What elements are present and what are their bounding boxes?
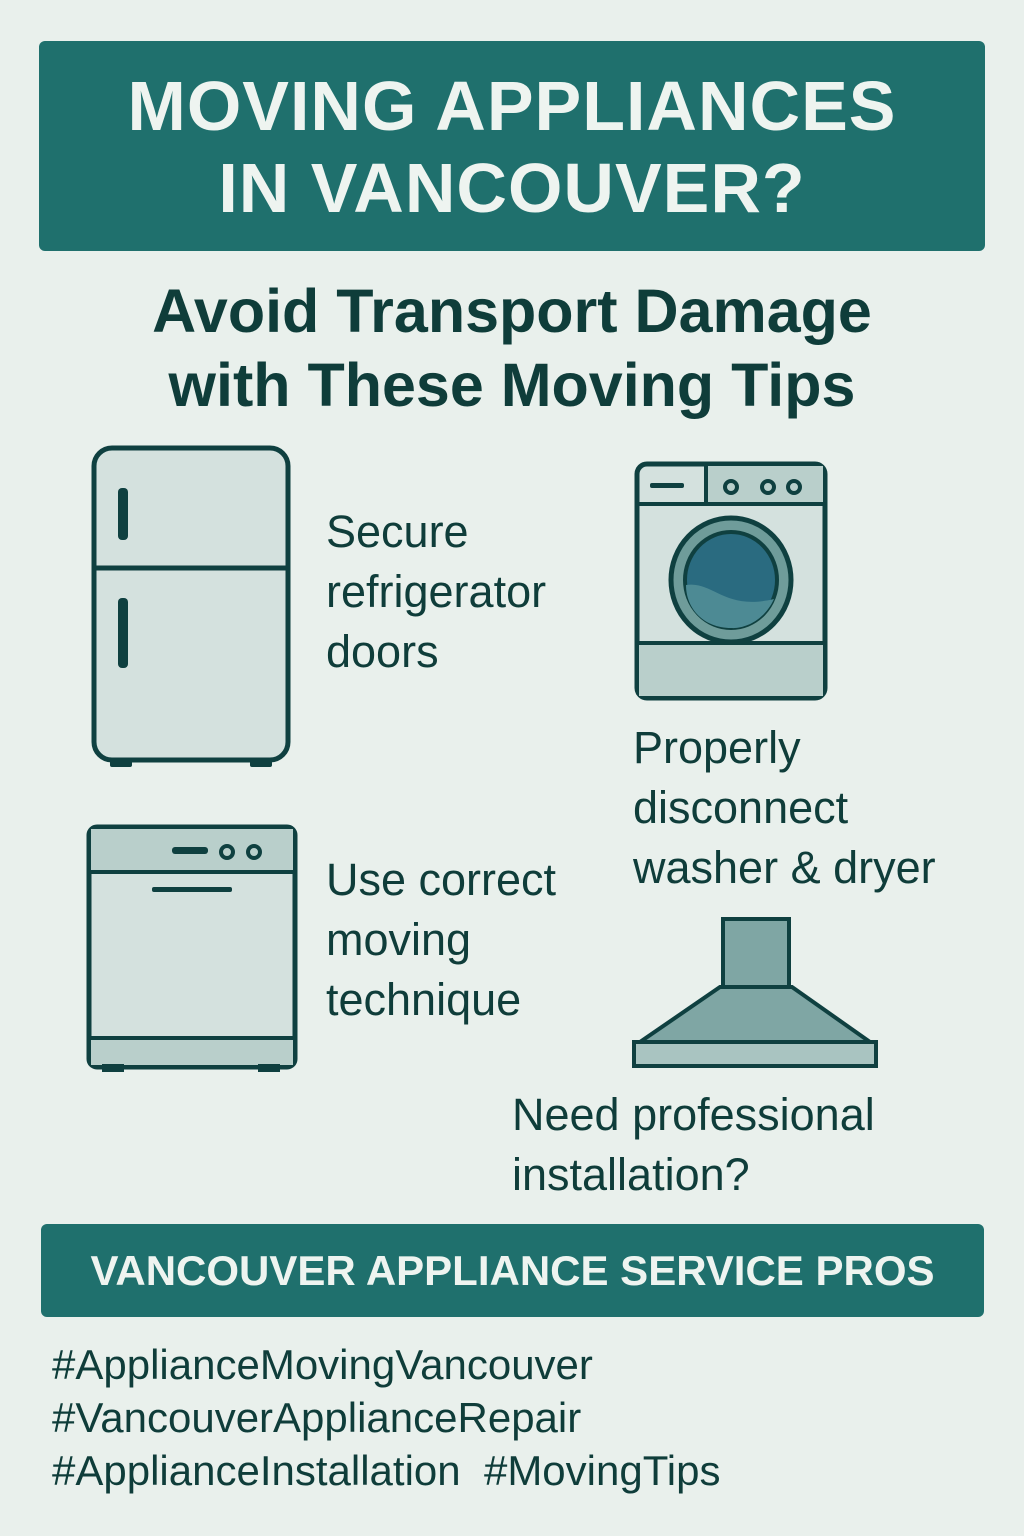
subtitle: Avoid Transport Damage: [152, 277, 872, 345]
icon: refrigerator: [92, 446, 290, 767]
text: secure fridge doors: Secure: [326, 506, 469, 557]
title banner: IN VANCOUVER?: [218, 149, 806, 227]
text: disconnect washer: washer & dryer: [633, 842, 936, 893]
text: moving technique: [326, 854, 556, 1025]
icon: washer: [634, 462, 828, 700]
icon: dishwasher: [86, 824, 298, 1072]
subtitle: with These Moving Tips: [169, 351, 855, 419]
text: disconnect washer: Properly: [633, 722, 801, 773]
hashtags: [52, 1341, 720, 1494]
title banner: MOVING APPLIANCES: [128, 67, 896, 145]
text: professional installation: [512, 1089, 875, 1200]
text: secure fridge doors: refrigerator: [326, 566, 546, 617]
text: professional installation: Need professional: [512, 1089, 875, 1140]
text: moving technique: moving: [326, 914, 471, 965]
hashtags: #ApplianceMovingVancouver: [52, 1341, 593, 1388]
text: disconnect washer: [633, 722, 936, 893]
subtitle: [152, 277, 872, 419]
text: moving technique: Use correct: [326, 854, 556, 905]
footer banner: VANCOUVER APPLIANCE SERVICE PROS: [90, 1247, 935, 1294]
text: moving technique: technique: [326, 974, 521, 1025]
hashtags: #ApplianceInstallation #MovingTips: [52, 1447, 720, 1494]
text: disconnect washer: disconnect: [633, 782, 848, 833]
text: secure fridge doors: doors: [326, 626, 439, 677]
icon: range hood: [632, 917, 878, 1068]
title banner: [39, 41, 985, 251]
text: professional installation: installation?: [512, 1149, 750, 1200]
footer banner: [41, 1224, 984, 1317]
hashtags: #VancouverApplianceRepair: [52, 1394, 581, 1441]
text: secure fridge doors: [326, 506, 546, 677]
